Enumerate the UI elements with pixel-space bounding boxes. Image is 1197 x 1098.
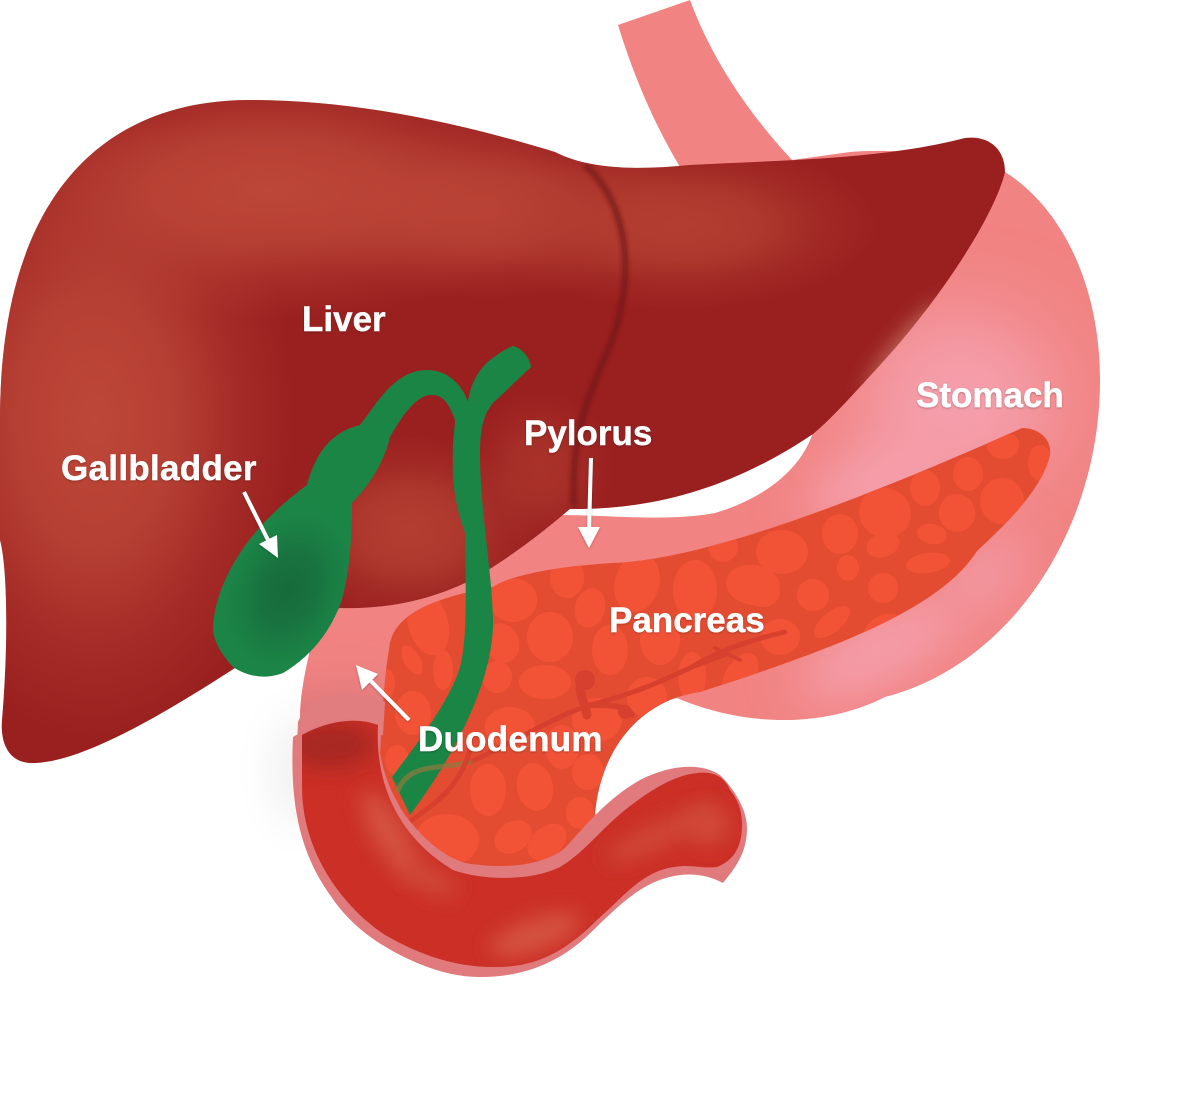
liver lobe seam: [574, 165, 625, 506]
duodenum cuff: [297, 693, 385, 745]
label: Pancreas: Pancreas: [609, 601, 765, 640]
label: Pylorus: Pylorus: [524, 414, 652, 453]
panel: pancreas: [378, 428, 1052, 880]
label: Liver: Liver: [302, 300, 386, 339]
arrow: pylorus: [578, 458, 600, 548]
panel: stomach and esophagus: [275, 0, 1100, 760]
duodenum outer wall: [292, 719, 747, 977]
label: Duodenum: Duodenum: [418, 720, 603, 759]
label: Stomach: Stomach: [916, 376, 1064, 415]
panel: gallbladder and bile duct: [196, 346, 531, 815]
panel: liver: [0, 60, 1005, 763]
pancreas lobules: [379, 431, 1052, 868]
label: Gallbladder: Gallbladder: [61, 449, 257, 488]
duodenum lumen: [302, 721, 742, 967]
pancreatic duct: [398, 632, 785, 820]
panel: duodenum: [285, 693, 747, 977]
soft shadow beside duodenum: [280, 715, 320, 825]
arrow: gallbladder: [244, 492, 278, 558]
arrow: duodenum: [356, 665, 409, 720]
